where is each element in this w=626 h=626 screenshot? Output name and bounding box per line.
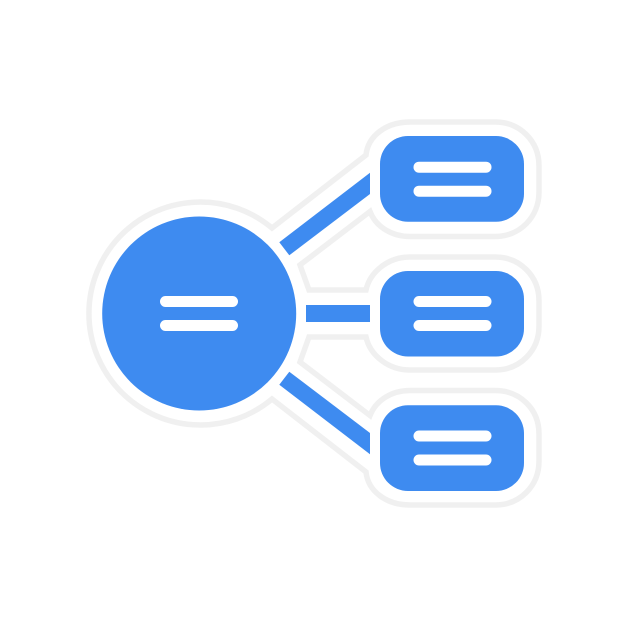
central circle node xyxy=(102,216,296,410)
connector: middle xyxy=(306,305,370,322)
connector: bottom xyxy=(279,372,370,454)
bottom box node xyxy=(380,405,524,491)
middle box node xyxy=(380,271,524,356)
sticker outline xyxy=(89,122,539,505)
top box node xyxy=(380,136,524,222)
connector: top xyxy=(279,173,370,255)
